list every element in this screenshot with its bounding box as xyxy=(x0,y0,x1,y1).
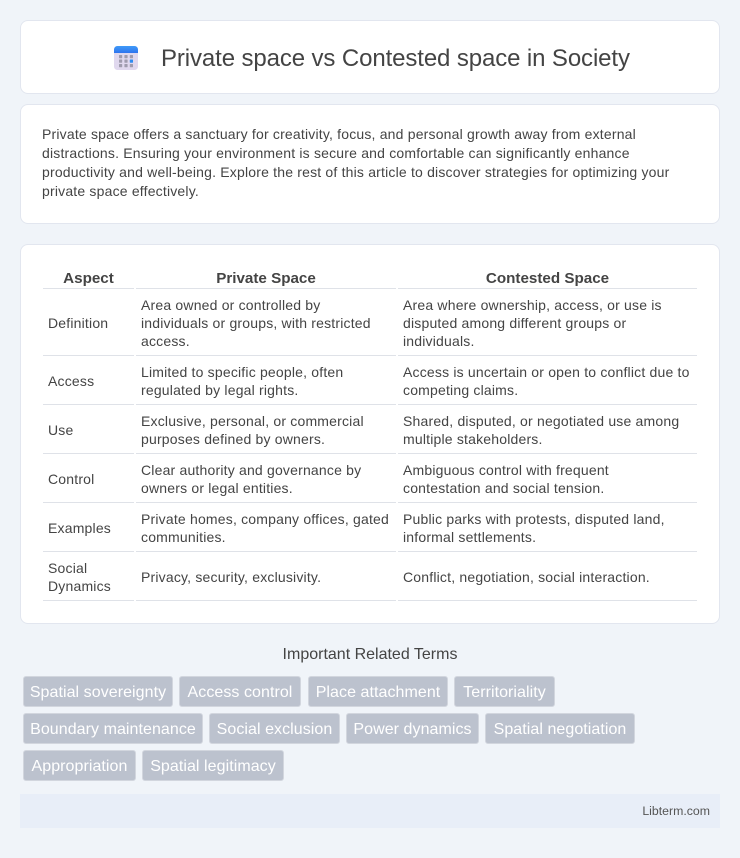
tag: Place attachment xyxy=(316,684,440,701)
panel: header xyxy=(20,20,720,94)
tag xyxy=(209,713,340,744)
table header row xyxy=(43,270,697,289)
table row: Examples: communities. xyxy=(141,529,226,545)
tag: Access control xyxy=(188,684,292,701)
text block: introduction xyxy=(42,126,670,199)
tag: Social exclusion xyxy=(217,721,332,738)
table row: Access: competing claims. xyxy=(403,382,518,398)
table row: Social Dynamics xyxy=(43,560,697,601)
table row: Control: Control xyxy=(48,471,94,487)
table row: Examples: Private homes, company offices, gated xyxy=(141,511,389,527)
table row: Control: owners or legal entities. xyxy=(141,480,293,496)
table row: Use xyxy=(43,413,697,454)
tag: Spatial negotiation xyxy=(494,721,626,738)
table row: Definition: Definition xyxy=(48,315,108,331)
table row: Use: multiple stakeholders. xyxy=(403,431,543,447)
table row: Definition: individuals. xyxy=(403,333,475,349)
table row: Examples: informal settlements. xyxy=(403,529,536,545)
panel: introduction xyxy=(20,104,720,224)
column heading: Aspect: Aspect xyxy=(63,270,114,287)
tag: Power dynamics xyxy=(353,721,472,738)
text block: introduction: private space effectively. xyxy=(42,183,199,199)
footer credit: Libterm.com xyxy=(642,804,710,818)
table row: Definition: individuals or groups, with restricted xyxy=(141,315,371,331)
tag: Territoriality xyxy=(463,684,546,701)
table row: Definition: Area where ownership, access, or use is xyxy=(403,297,662,313)
tag xyxy=(142,750,284,781)
table row: Definition: access. xyxy=(141,333,190,349)
table row: Use: Exclusive, personal, or commercial xyxy=(141,413,364,429)
tag xyxy=(23,750,136,781)
tag: Boundary maintenance xyxy=(30,721,196,738)
table row: Access: Limited to specific people, often xyxy=(141,364,343,380)
icon: calendar xyxy=(114,46,138,70)
table row: Access: Access is uncertain or open to conflict due to xyxy=(403,364,690,380)
tag: Spatial sovereignty xyxy=(30,684,166,701)
footer bar xyxy=(20,794,720,828)
panel: comparison table xyxy=(20,244,720,624)
column heading: Private Space: Private Space xyxy=(216,270,316,287)
table row: Control xyxy=(43,462,697,503)
table row: Use: purposes defined by owners. xyxy=(141,431,325,447)
table row: Access: Access xyxy=(48,373,94,389)
tag xyxy=(23,713,203,744)
table row: Definition xyxy=(43,297,697,356)
text block: introduction: productivity and well-being. Explore the rest of this article to discover strategies for optimizing your xyxy=(42,164,669,180)
table row: Control: Ambiguous control with frequent xyxy=(403,462,609,478)
text block: introduction: distractions. Ensuring your environment is secure and comfortable can significantly enhance xyxy=(42,145,630,161)
table row: Definition: Area owned or controlled by xyxy=(141,297,320,313)
text block: introduction: Private space offers a sanctuary for creativity, focus, and personal growth away from external xyxy=(42,126,636,142)
column heading: Contested Space: Contested Space xyxy=(486,270,609,287)
tag: Spatial legitimacy xyxy=(150,758,276,775)
tag xyxy=(179,676,301,707)
table row: Examples xyxy=(43,511,697,552)
table row: Social Dynamics: Privacy, security, exclusivity. xyxy=(141,569,321,585)
heading: Important Related Terms: Important Related Terms xyxy=(283,646,457,663)
table row: Social Dynamics: Conflict, negotiation, social interaction. xyxy=(403,569,650,585)
table row: Control: Clear authority and governance by xyxy=(141,462,361,478)
table row: Control: contestation and social tension. xyxy=(403,480,604,496)
table row: Social Dynamics: Social xyxy=(48,560,87,576)
table row: Examples: Examples xyxy=(48,520,111,536)
table row: Examples: Public parks with protests, disputed land, xyxy=(403,511,665,527)
title: Private space vs Contested space in Society xyxy=(161,45,630,72)
table row: Access xyxy=(43,364,697,405)
table row: Definition: disputed among different groups or xyxy=(403,315,626,331)
tag list: related terms xyxy=(23,676,635,781)
table row: Access: regulated by legal rights. xyxy=(141,382,298,398)
table row: Social Dynamics: Dynamics xyxy=(48,578,111,594)
tag xyxy=(23,676,173,707)
table row: Use: Shared, disputed, or negotiated use among xyxy=(403,413,679,429)
tag: Appropriation xyxy=(32,758,127,775)
table row: Use: Use xyxy=(48,422,73,438)
tag xyxy=(485,713,635,744)
tag xyxy=(454,676,555,707)
tag xyxy=(346,713,479,744)
tag xyxy=(308,676,448,707)
